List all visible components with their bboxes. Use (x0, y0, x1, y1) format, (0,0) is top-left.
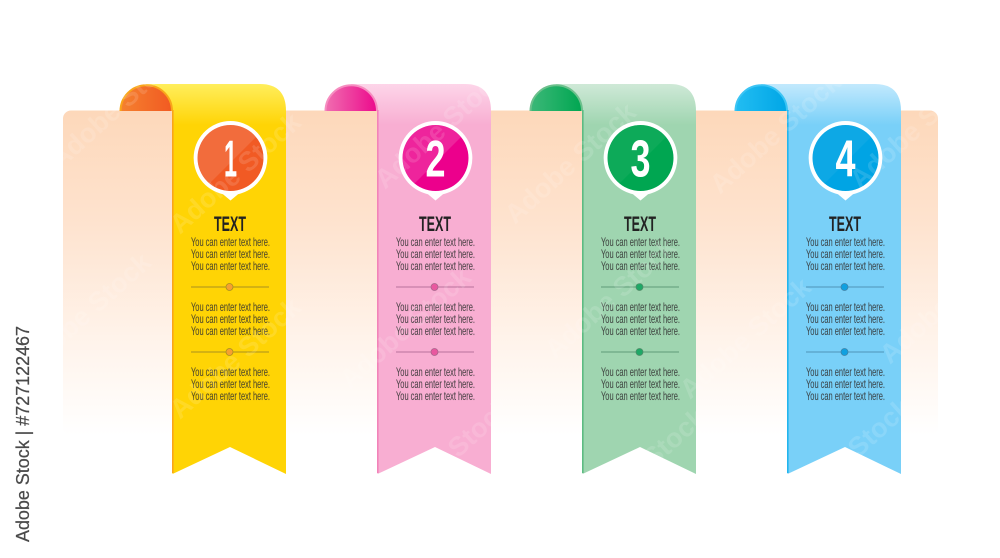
ribbon 3 text block 1 (601, 235, 680, 273)
ribbon 2 text block 2: You can enter text here. (396, 312, 475, 326)
ribbon 3 text block 3: You can enter text here. (601, 389, 680, 403)
ribbon 4 text block 2: You can enter text here. (806, 324, 885, 338)
ribbon 2 text block 1: You can enter text here. (396, 259, 475, 273)
ribbon 2 body (351, 84, 491, 474)
ribbon 3 text block 2: You can enter text here. (601, 324, 680, 338)
ribbon 1 text block 2 (191, 300, 270, 338)
ribbon 1 text block 1: You can enter text here. (191, 259, 270, 273)
stock id caption: Adobe Stock | #727122467 (13, 326, 33, 542)
background panel (63, 110, 938, 436)
stock watermark pattern: Adobe Stock (334, 261, 477, 394)
ribbon 2 text block 2 (396, 300, 475, 338)
stock watermark pattern: Adobe Stock (499, 96, 642, 229)
ribbon 4 text block 3: You can enter text here. (806, 365, 885, 379)
ribbon 2 (326, 84, 491, 474)
ribbon 3 text block 2: You can enter text here. (601, 300, 680, 314)
stock watermark pattern: Adobe Stock (14, 246, 157, 379)
ribbon 1 fold (120, 85, 172, 111)
ribbon 4 text block 1: You can enter text here. (806, 259, 885, 273)
stock watermark pattern: Adobe Stock (774, 391, 917, 524)
ribbon 1 number badge (190, 121, 271, 200)
stock watermark pattern: Adobe Stock (704, 66, 847, 199)
ribbon 4 text block 3: You can enter text here. (806, 389, 885, 403)
infographic canvas (15, 84, 938, 542)
ribbon 2 text block 3: You can enter text here. (396, 365, 475, 379)
ribbon 3 (530, 84, 696, 474)
ribbon 4 text block 1: You can enter text here. (806, 235, 885, 249)
ribbon 2 number badge: 2 (426, 130, 446, 188)
ribbon 2 heading: TEXT (419, 213, 451, 236)
ribbon 1 divider 1 (191, 284, 269, 290)
ribbon 2 text block 1 (396, 235, 475, 273)
ribbon 2 divider 1 (396, 284, 474, 290)
ribbon 4 text block 2: You can enter text here. (806, 300, 885, 314)
ribbon 2 divider 2 (396, 348, 474, 356)
ribbon 1 text block 2: You can enter text here. (191, 324, 270, 338)
ribbon 1 text block 3: You can enter text here. (191, 377, 270, 391)
ribbon 1 text block 3: You can enter text here. (191, 365, 270, 379)
ribbon 1 text block 2: You can enter text here. (191, 312, 270, 326)
ribbon 3 text block 2: You can enter text here. (601, 312, 680, 326)
stock watermark pattern: Adobe Stock (369, 61, 512, 194)
ribbon 4 text block 3: You can enter text here. (806, 377, 885, 391)
ribbon 3 fold (530, 85, 582, 111)
stock watermark pattern: Adobe Stock (539, 231, 682, 364)
ribbon 2 text block 1: You can enter text here. (396, 235, 475, 249)
ribbon 3 divider 2 (601, 348, 679, 356)
ribbon 1 number badge: 1 (224, 130, 237, 188)
stock watermark pattern: Adobe Stock (164, 291, 307, 424)
ribbon 3 heading: TEXT (624, 213, 656, 236)
ribbon 4 divider 1 (806, 284, 884, 290)
ribbon 4 number badge (805, 121, 886, 200)
stock watermark pattern: Adobe Stock (374, 391, 517, 524)
ribbon 4 text block 1 (806, 235, 885, 273)
ribbon 4 heading: TEXT (829, 213, 861, 236)
ribbon 1 text block 2: You can enter text here. (191, 300, 270, 314)
ribbon 4 text block 1: You can enter text here. (806, 247, 885, 261)
ribbon 2 text block 3 (396, 365, 475, 403)
ribbon 1 text block 1: You can enter text here. (191, 235, 270, 249)
ribbon 3 text block 1: You can enter text here. (601, 247, 680, 261)
ribbon 3 text block 1: You can enter text here. (601, 235, 680, 249)
ribbon 4 text block 2: You can enter text here. (806, 312, 885, 326)
ribbon 2 text block 2: You can enter text here. (396, 300, 475, 314)
ribbon 1 text block 1 (191, 235, 270, 273)
ribbon 3 number badge: 3 (630, 130, 650, 188)
ribbon 2 fold (326, 85, 377, 111)
ribbon 3 text block 3 (601, 365, 680, 403)
ribbon 1 heading: TEXT (214, 213, 246, 236)
stock watermark pattern: Adobe Stock (44, 41, 187, 174)
ribbon 4 text block 2 (806, 300, 885, 338)
ribbon 1 text block 1: You can enter text here. (191, 247, 270, 261)
ribbon 4 fold (736, 85, 787, 111)
ribbon 4 text block 3 (806, 365, 885, 403)
ribbon 3 number badge (600, 121, 681, 200)
ribbon 3 body (556, 84, 696, 474)
ribbon 2 number badge (395, 121, 476, 200)
ribbon 4 divider 2 (806, 348, 884, 356)
stock watermark pattern: Adobe Stock (844, 61, 987, 194)
stock watermark pattern: Adobe Stock (569, 401, 712, 534)
ribbon 3 text block 1: You can enter text here. (601, 259, 680, 273)
ribbon 4 number badge: 4 (836, 130, 856, 188)
ribbon 2 text block 2: You can enter text here. (396, 324, 475, 338)
ribbon 3 text block 3: You can enter text here. (601, 365, 680, 379)
stock watermark pattern: Adobe Stock (674, 271, 817, 404)
stock watermark pattern: Adobe Stock (164, 106, 307, 239)
ribbon 1 text block 3 (191, 365, 270, 403)
ribbon 2 text block 1: You can enter text here. (396, 247, 475, 261)
ribbon 3 text block 3: You can enter text here. (601, 377, 680, 391)
ribbon 1 (120, 84, 286, 474)
ribbon 2 text block 3: You can enter text here. (396, 389, 475, 403)
ribbon 1 body (146, 84, 286, 474)
ribbon 2 text block 3: You can enter text here. (396, 377, 475, 391)
ribbon 3 text block 2 (601, 300, 680, 338)
ribbon 4 body (761, 84, 901, 474)
ribbon 1 text block 3: You can enter text here. (191, 389, 270, 403)
ribbon 1 divider 2 (191, 348, 269, 356)
ribbon 3 divider 1 (601, 284, 679, 290)
ribbon 4 (736, 84, 901, 474)
